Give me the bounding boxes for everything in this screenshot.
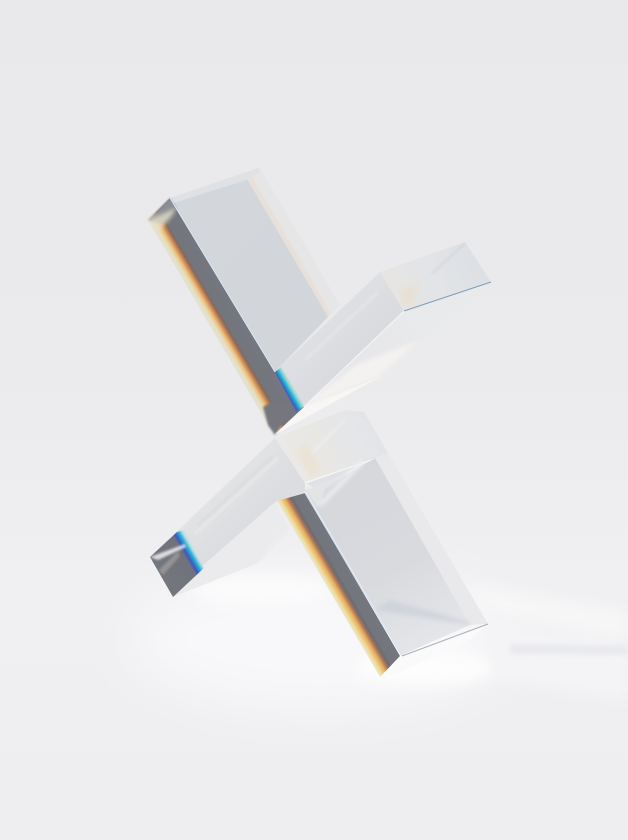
central block: [275, 410, 388, 490]
highlight edge: [305, 493, 402, 656]
grey side face with rainbow band: [148, 198, 304, 435]
blue refraction: [275, 367, 306, 412]
long face: [150, 438, 305, 570]
floor reflection: [375, 600, 470, 625]
highlight edge: [170, 198, 275, 372]
streak: [305, 292, 378, 360]
blue edge: [404, 282, 491, 311]
bottom face: [304, 282, 491, 407]
lower right bar: [277, 453, 488, 678]
far strip: [246, 168, 340, 317]
long face: [279, 272, 404, 407]
top edge: [170, 168, 260, 203]
lower left bar: [150, 438, 305, 597]
upper left bar: [148, 168, 340, 435]
refraction line: [247, 177, 331, 317]
front face: [305, 458, 470, 655]
top face: [380, 242, 491, 311]
end cap: [150, 530, 204, 597]
grey side face with rainbow band: [277, 493, 400, 677]
rainbow end fade: [263, 400, 300, 435]
far strip: [375, 453, 488, 625]
front face: [170, 177, 328, 372]
bottom edge: [382, 624, 488, 678]
under face: [173, 502, 290, 597]
upper right bar: [274, 242, 491, 435]
end cap: [148, 198, 177, 224]
floor light glows: [130, 570, 628, 710]
